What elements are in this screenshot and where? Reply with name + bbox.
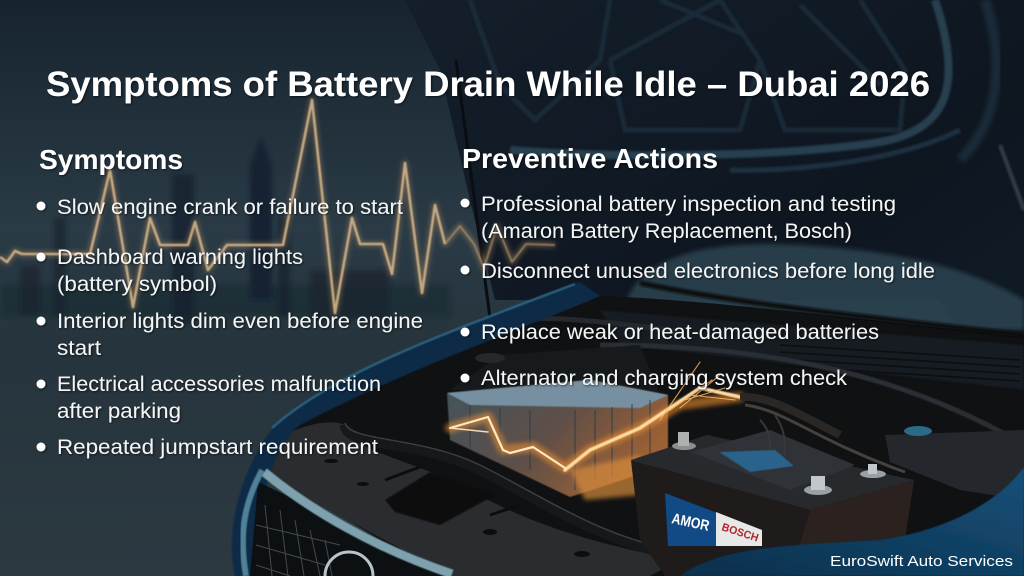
bullet: alternator: Alternator and charging system check [481, 366, 847, 390]
bay top plate [450, 345, 660, 395]
title: Symptoms of Battery Drain While Idle – Dubai 2026 [46, 65, 930, 104]
brand label: AMOR [670, 510, 711, 535]
hood lower light panel [625, 244, 1024, 330]
bullet: slow crank: Slow engine crank or failure to start [57, 195, 403, 219]
bullet: warning lights: (battery symbol) [57, 272, 217, 296]
bullet: interior lights: start [57, 336, 101, 360]
bullet: replace: Replace weak or heat-damaged batteries [481, 320, 879, 344]
wiper and cowl [640, 283, 1024, 335]
hood strut [456, 60, 490, 318]
rubber hose [345, 425, 860, 554]
bullet: accessories [36, 372, 381, 423]
panel: symptoms [36, 144, 423, 459]
bullet: disconnect: Disconnect unused electronics before long idle [481, 259, 935, 283]
bullet: warning lights [36, 245, 303, 296]
wiring and right reservoir [740, 397, 1024, 500]
bullet: inspection: (Amaron Battery Replacement, Bosch) [481, 219, 852, 243]
bullet: accessories: after parking [57, 399, 181, 423]
engine bay [265, 283, 1024, 576]
bullet: interior lights: Interior lights dim even before engine [57, 309, 423, 333]
electric discharge [450, 362, 740, 470]
bullet: jumpstart: Repeated jumpstart requirement [57, 435, 378, 459]
car body fender left [232, 282, 600, 576]
inner bay plate [265, 422, 680, 576]
bullet: inspection [460, 192, 896, 243]
bullet: warning lights: Dashboard warning lights [57, 245, 303, 269]
fuse mount [475, 353, 505, 363]
bullet: interior lights [36, 309, 423, 360]
battery lid [690, 430, 855, 490]
bullet: inspection: Professional battery inspection and testing [481, 192, 896, 216]
dark car battery [631, 430, 914, 576]
heading: preventive actions: Preventive Actions [462, 143, 718, 174]
heading: symptoms: Symptoms [39, 144, 183, 175]
brand label: BOSCH [720, 521, 760, 545]
cowl vent [780, 345, 1020, 381]
bay recess [385, 472, 495, 525]
footer brand: EuroSwift Auto Services [830, 553, 1013, 570]
lower right blue fender [680, 467, 1024, 576]
car hood underside [405, 0, 1024, 440]
ECG heartbeat line [0, 100, 555, 313]
panel: preventive actions [460, 143, 935, 390]
curved bay tube [600, 345, 1024, 445]
brand label [665, 493, 762, 546]
battery terminals [672, 442, 696, 450]
skyline silhouette [0, 137, 450, 324]
translucent glowing battery [447, 380, 668, 500]
front grille and badge [243, 470, 452, 576]
hood panel ribs [470, 0, 905, 130]
bullet: accessories: Electrical accessories malfunction [57, 372, 381, 396]
